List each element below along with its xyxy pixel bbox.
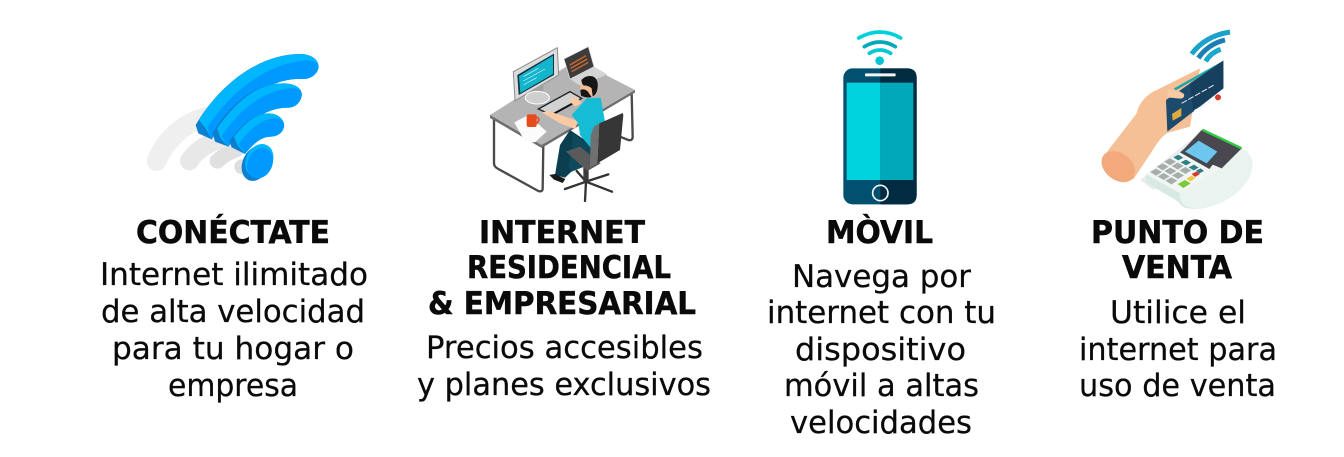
text block: movil description: velocidades: [790, 405, 972, 441]
heading: internet residencial y empresarial: [428, 215, 696, 322]
text block: movil description: Navega por: [792, 259, 971, 295]
text block: precios: y planes exclusivos: [417, 367, 711, 403]
text block: punto de venta description: Utilice el: [1110, 295, 1246, 331]
heading: conectate: CONÉCTATE: [136, 215, 330, 251]
text block: movil description: móvil a altas: [784, 368, 979, 404]
terminal: [1140, 135, 1203, 190]
text block: movil description: internet con tu: [767, 295, 996, 331]
text block: punto de venta description: uso de venta: [1079, 368, 1276, 404]
text block: precios: Precios accesibles: [426, 330, 703, 366]
icon: card payment terminal: [1095, 32, 1252, 209]
heading: internet residencial y empresarial: INTERNET: [479, 215, 645, 251]
hand and arm: [1103, 68, 1200, 179]
heading: movil: MÒVIL: [826, 214, 933, 251]
text block: movil description: [767, 259, 996, 441]
text block: conectate description: para tu hogar o: [112, 331, 354, 367]
heading: punto de venta: [1091, 215, 1264, 286]
panel: movil: [767, 32, 996, 441]
heading: punto de venta: PUNTO DE: [1091, 215, 1264, 251]
heading: internet residencial y empresarial: RESIDENCIAL: [467, 250, 671, 286]
heading: internet residencial y empresarial: & EMPRESARIAL: [428, 286, 696, 322]
text block: conectate description: empresa: [168, 368, 298, 404]
text block: precios: [417, 330, 711, 403]
text block: punto de venta description: internet para: [1079, 332, 1277, 368]
heading: punto de venta: VENTA: [1122, 250, 1232, 286]
icon: person working at desk: [490, 47, 635, 201]
icon: 3D wifi signal: [157, 54, 319, 186]
text block: conectate description: Internet ilimitado: [100, 257, 368, 293]
panel: conectate: [100, 54, 368, 404]
text block: punto de venta description: [1079, 295, 1277, 404]
icon: smartphone with wifi: [843, 32, 917, 204]
text block: conectate description: de alta velocidad: [101, 294, 365, 330]
panel: internet residencial y empresarial: [417, 47, 711, 403]
panel: punto de venta: [1079, 32, 1277, 404]
text block: movil description: dispositivo: [795, 332, 966, 368]
text block: conectate description: [100, 257, 368, 404]
